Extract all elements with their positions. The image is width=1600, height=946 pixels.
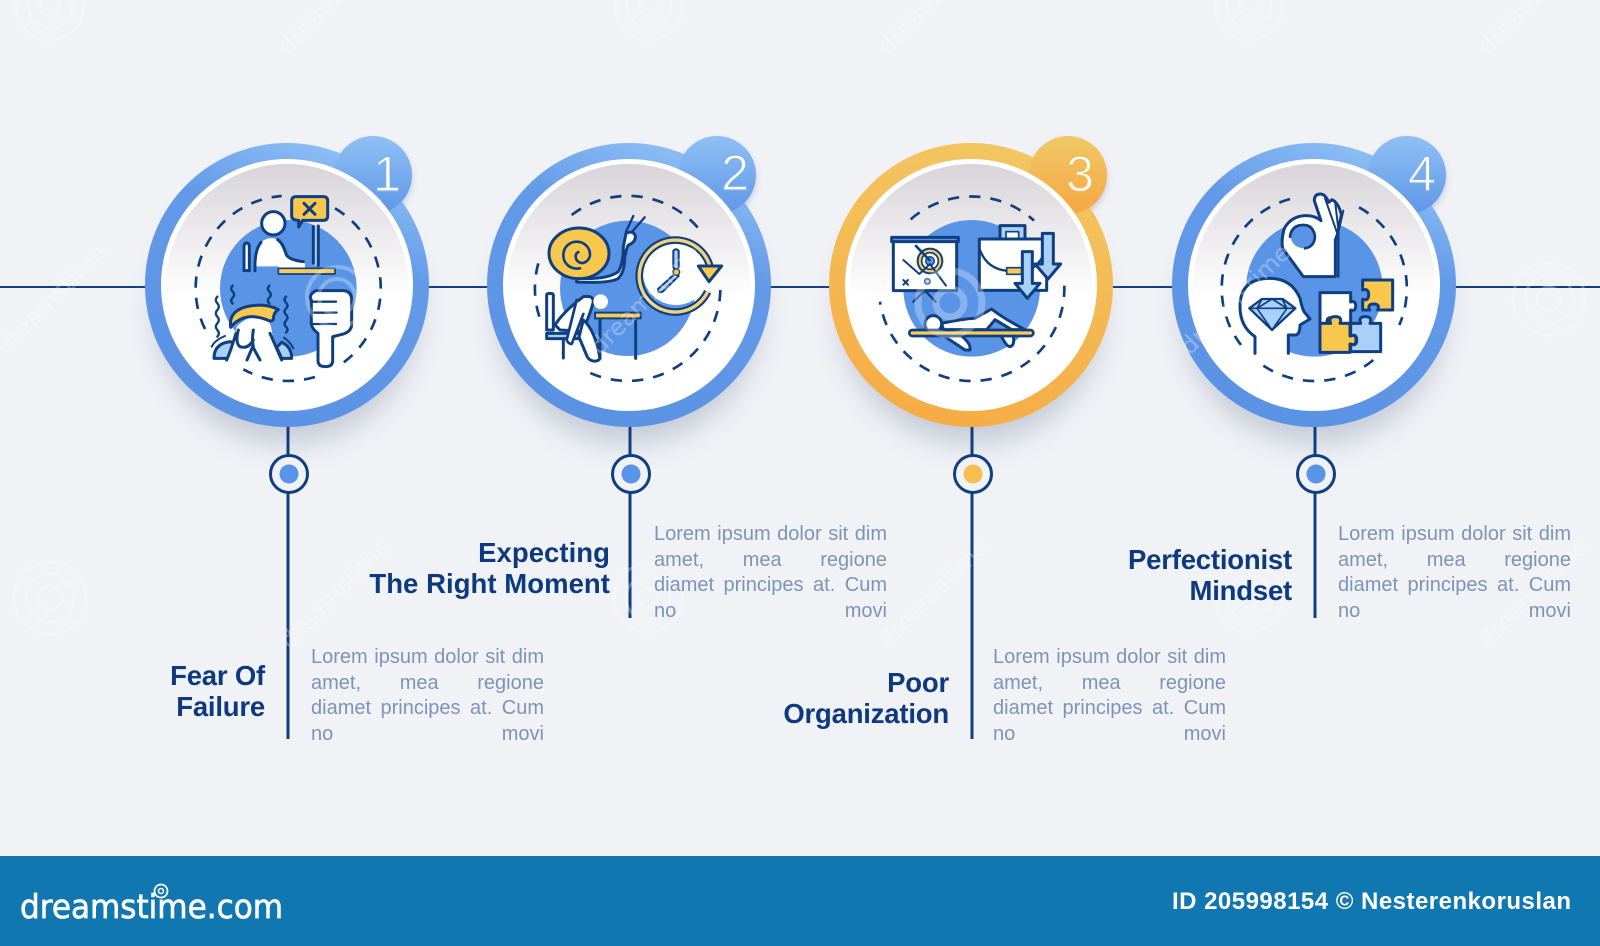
heading: fear of failure: Fear Of (170, 660, 265, 691)
body text 4 (1338, 523, 1571, 622)
connector 1 with node (270, 425, 308, 739)
number badge 1 (334, 136, 412, 214)
body text 1: diamet principes at. Cum (311, 697, 544, 719)
body text 4: no movi (1338, 600, 1571, 622)
watermark words: dreamstime (1174, 239, 1296, 360)
body text 3: Lorem ipsum dolor sit dim (993, 646, 1226, 668)
body text 3: diamet principes at. Cum (993, 697, 1226, 719)
body text 1: no movi (311, 723, 544, 745)
heading: perfectionist mindset (1128, 544, 1292, 606)
heading: expecting the right moment: The Right Moment (369, 568, 610, 599)
body text 2: Lorem ipsum dolor sit dim (654, 523, 887, 545)
step 3 drop shadow (839, 180, 1103, 444)
body text 1 (311, 646, 544, 745)
step 1 circle (145, 136, 429, 427)
body text 4: amet, mea regione (1338, 549, 1571, 571)
connector 4 with node (1298, 425, 1334, 618)
connector 3 with node (954, 425, 992, 739)
watermark words: dreamstime (584, 239, 706, 360)
number badge 4: 4 (1408, 146, 1436, 202)
heading: poor organization: Poor (887, 667, 949, 698)
body text 1: Lorem ipsum dolor sit dim (311, 646, 544, 668)
heading: fear of failure (170, 660, 266, 722)
watermark words (0, 0, 1594, 654)
heading: fear of failure: Failure (176, 691, 265, 722)
body text 3: amet, mea regione (993, 672, 1226, 694)
step 2 drop shadow (497, 180, 761, 444)
number badge 3: 3 (1066, 146, 1094, 202)
number badge 4 (1368, 136, 1446, 214)
body text 2 (654, 523, 887, 622)
connector 2 with node (612, 425, 650, 618)
bottom banner (0, 856, 1600, 946)
step 2 circle (487, 136, 771, 427)
body text 4: Lorem ipsum dolor sit dim (1338, 523, 1571, 545)
heading: expecting the right moment: Expecting (478, 537, 610, 568)
heading: poor organization: Organization (783, 698, 949, 729)
step 4 circle (1172, 136, 1456, 427)
body text 3: no movi (993, 723, 1226, 745)
watermark words: dreamstime (274, 533, 396, 654)
number badge 2: 2 (721, 145, 749, 201)
body text 2: diamet principes at. Cum (654, 574, 887, 596)
icon: poor organization (880, 196, 1064, 381)
heading: poor organization (783, 667, 949, 729)
horizontal timeline line (0, 286, 1600, 288)
step 1 drop shadow (155, 180, 419, 444)
watermark words: dreamstime (1472, 533, 1594, 654)
icon: expecting the right moment (535, 196, 722, 381)
icon: perfectionist mindset (1222, 194, 1407, 381)
body text 2: amet, mea regione (654, 549, 887, 571)
heading: expecting the right moment (369, 537, 610, 599)
watermark words: dreamstime (872, 533, 994, 654)
number badge 1: 1 (373, 146, 401, 202)
body text 3 (993, 646, 1226, 745)
heading: perfectionist mindset: Mindset (1190, 575, 1292, 606)
step 3 circle (829, 136, 1113, 427)
banner logo: dreamstime.com (20, 887, 283, 926)
body text 1: amet, mea regione (311, 672, 544, 694)
heading: perfectionist mindset: Perfectionist (1128, 544, 1292, 575)
icon: fear of failure (196, 196, 381, 381)
watermarks (14, 0, 1585, 634)
body text 4: diamet principes at. Cum (1338, 574, 1571, 596)
body text 2: no movi (654, 600, 887, 622)
number badge 2 (678, 136, 756, 214)
step 4 drop shadow (1182, 180, 1446, 444)
number badge 3 (1029, 136, 1107, 214)
banner image id and author: ID 205998154 © Nesterenkoruslan (1172, 888, 1571, 915)
